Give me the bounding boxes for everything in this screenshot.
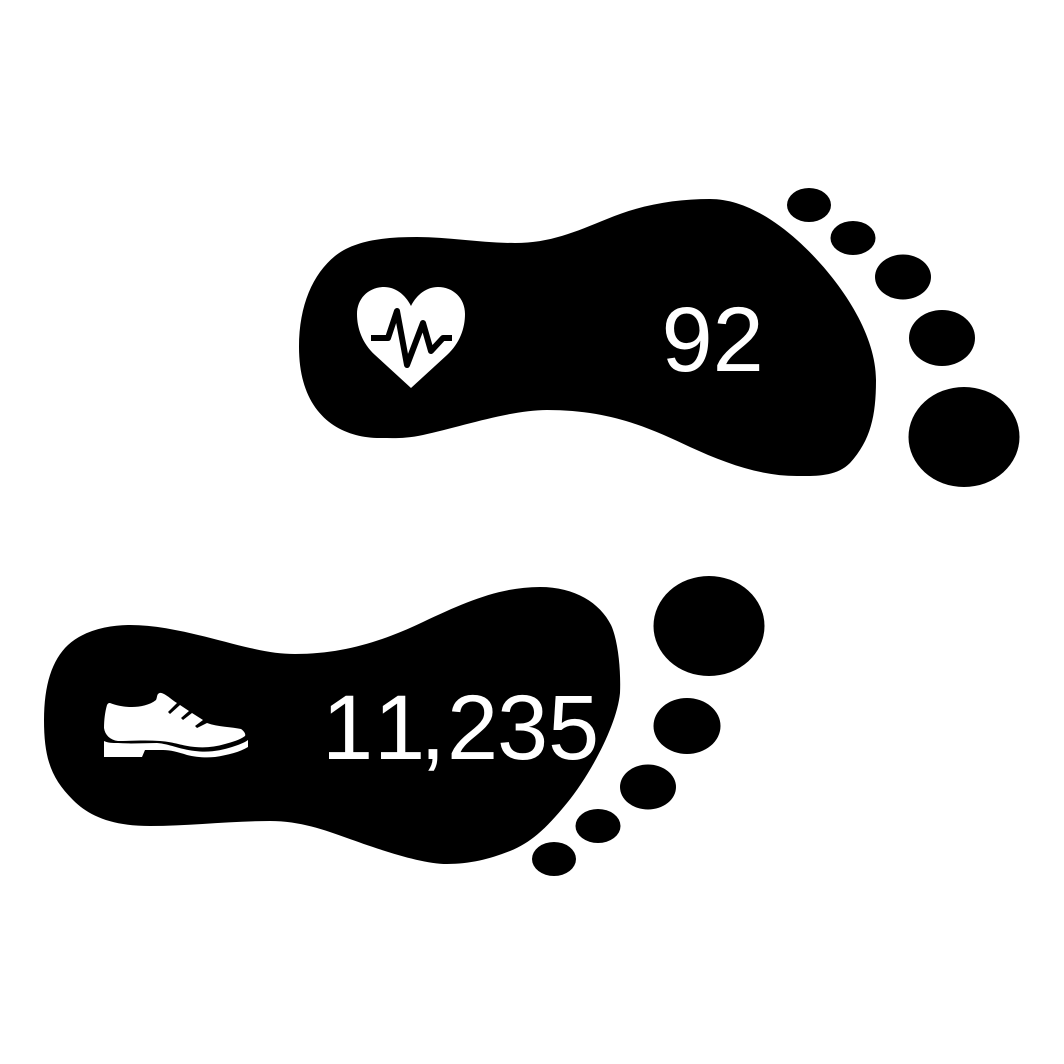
footprint: heart rate xyxy=(299,188,1020,487)
foot sole: bottom xyxy=(44,587,620,864)
foot sole: top xyxy=(299,199,876,476)
value: heart rate: 92 xyxy=(662,289,764,391)
footprint: steps xyxy=(44,576,764,876)
icon: heart with pulse line xyxy=(357,287,465,388)
value: steps: 11,235 xyxy=(322,677,599,779)
toes: top foot xyxy=(787,188,1020,487)
toes: bottom foot xyxy=(532,576,764,876)
icon: shoe xyxy=(104,693,248,757)
